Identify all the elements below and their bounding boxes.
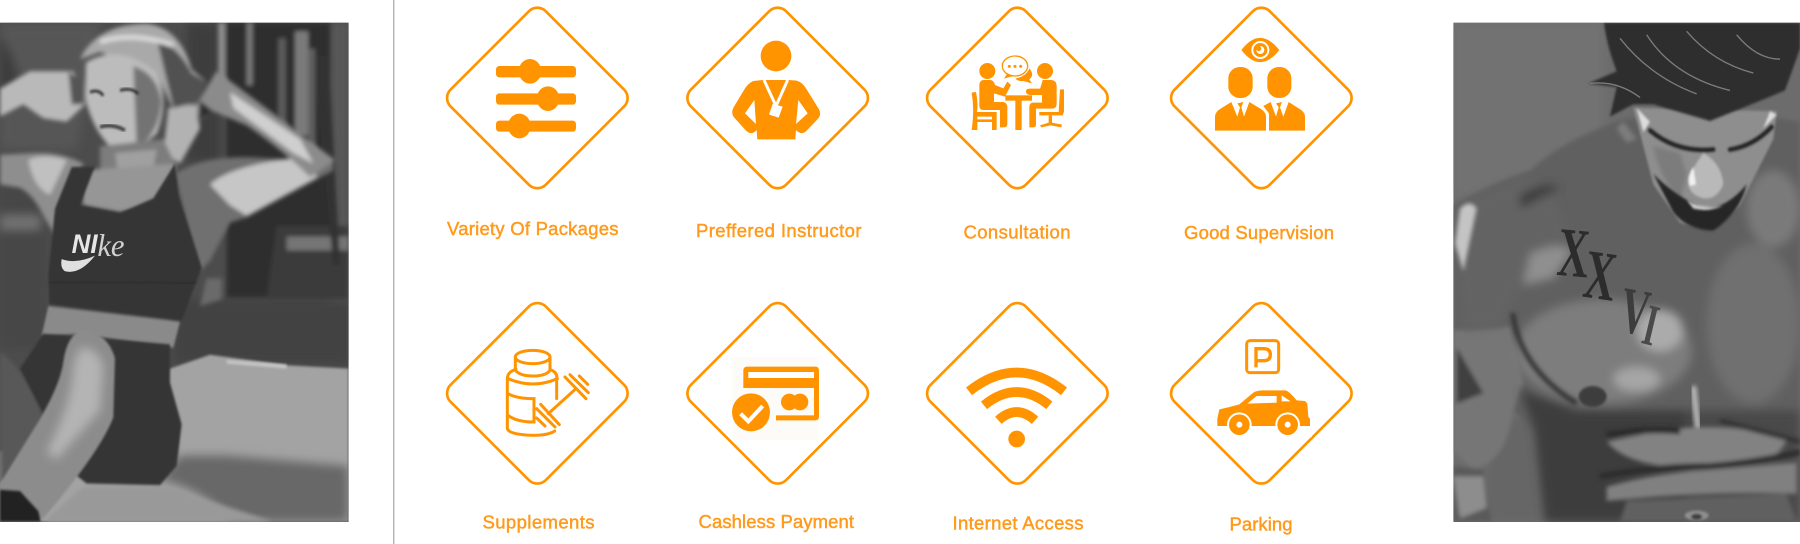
card: internet access diamond — [922, 298, 1113, 489]
icon: credit card — [732, 357, 819, 440]
label: Variety Of Packages: Variety Of Packages — [447, 218, 618, 239]
tattoo lettering: I — [1637, 292, 1665, 359]
card: supplements diamond — [442, 298, 633, 489]
icon: wifi — [969, 372, 1064, 447]
head and hair — [1588, 23, 1800, 231]
icon: supplement jar and dumbbell — [507, 350, 588, 435]
card: parking diamond — [1166, 298, 1357, 489]
logo text on top: ke — [97, 227, 125, 263]
label: Consultation: Consultation — [964, 222, 1070, 242]
icon: consultation — [972, 56, 1064, 130]
torso and abs — [1455, 203, 1800, 522]
label: Good Supervision: Good Supervision — [1184, 222, 1334, 243]
card: variety of packages diamond — [442, 3, 633, 193]
card: good supervision diamond — [1166, 3, 1357, 193]
icon: supervision — [1215, 38, 1305, 131]
tattoo lettering: X — [1580, 234, 1621, 316]
card: cashless payment diamond — [682, 298, 873, 489]
photo: muscular man — [1453, 23, 1800, 522]
tattoo lettering: X — [1555, 212, 1592, 293]
label: Cashless Payment: Cashless Payment — [698, 511, 854, 532]
tattoo lettering: V — [1615, 273, 1655, 350]
label: Preffered Instructor: Preffered Instructor — [696, 220, 862, 241]
row 1 icons right — [922, 3, 1357, 193]
row 2 icons left — [442, 298, 873, 489]
label: Supplements: Supplements — [482, 512, 594, 532]
logo text on top: NI — [72, 229, 98, 259]
icon: instructor — [732, 41, 820, 139]
icon: parking sign and car — [1217, 341, 1312, 437]
label: Parking: Parking — [1230, 514, 1292, 534]
card: consultation diamond — [922, 3, 1113, 193]
label: Internet Access: Internet Access — [952, 512, 1084, 534]
woman figure — [0, 24, 335, 522]
row 1 icons left — [442, 3, 873, 193]
logo text on top — [72, 234, 124, 256]
card: preferred instructor diamond — [682, 3, 873, 193]
icon: sliders — [496, 59, 576, 138]
divider line — [393, 0, 394, 544]
tattoo lettering — [1556, 229, 1660, 346]
photo: woman doing sit-ups — [0, 23, 350, 522]
row 2 icons right — [922, 298, 1357, 489]
floor mat — [0, 355, 348, 522]
